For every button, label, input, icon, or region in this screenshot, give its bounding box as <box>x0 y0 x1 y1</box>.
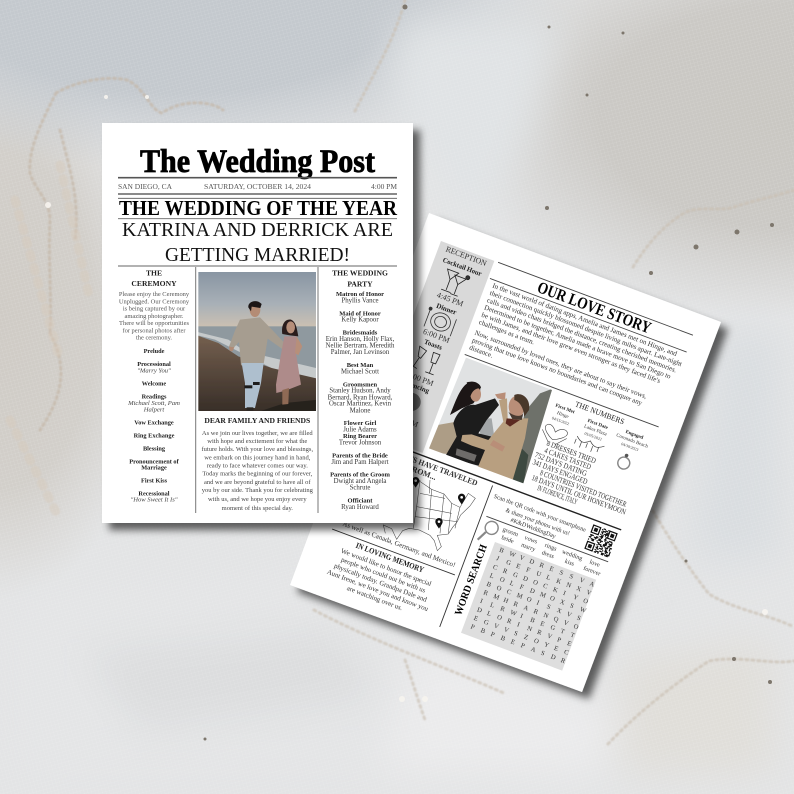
matron of honor: Matron of Honor <box>336 291 384 298</box>
main headline: THE WEDDING OF THE YEAR <box>119 196 398 220</box>
qr instructions: Scan the QR code with your smartphone <box>493 493 587 534</box>
the numbers: THE NUMBERS <box>574 400 626 426</box>
in loving memory: physically today. Grandpa Dale and <box>333 563 428 604</box>
ceremony program: Ring Exchange <box>134 432 175 439</box>
in loving memory: are watching over us. <box>346 585 404 612</box>
flower girl and ring bearer: Ring Bearer <box>343 433 377 440</box>
panel: the wedding party: THE WEDDING <box>332 268 388 278</box>
milestone: engaged: Engaged <box>624 430 644 441</box>
sub headline <box>122 219 393 266</box>
word search grid <box>461 542 598 671</box>
numbers list: 18 DAYS UNTIL OUR HONEYMOON <box>530 473 627 517</box>
ceremony program: "How Sweet It Is" <box>130 497 178 504</box>
ceremony program: Processional <box>137 361 171 368</box>
groomsmen: Bernard, Ryan Howard, <box>328 394 393 401</box>
matron of honor <box>336 291 384 304</box>
maid of honor: Kelly Kapoor <box>341 317 379 324</box>
back page sheet <box>290 213 721 692</box>
heading: our love story: OUR LOVE STORY <box>535 277 654 337</box>
word list: wedding <box>561 548 583 562</box>
word search grid: BOCMOISXVS <box>485 581 582 623</box>
word search grid: RMHRARNQVO <box>482 589 580 631</box>
beach couple photo <box>198 272 316 411</box>
word list: bride <box>500 534 515 545</box>
bridesmaids <box>326 330 395 356</box>
text: love story: challenges as a team. <box>478 318 536 346</box>
word list: vows <box>524 534 539 546</box>
ceremony program: Blessing <box>143 445 166 452</box>
numbers list: 8 COUNTRIES VISITED TOGETHER <box>539 468 629 509</box>
ceremony intro text <box>119 291 190 342</box>
front newspaper page <box>102 123 413 523</box>
dateline <box>118 183 398 191</box>
officiant <box>341 497 379 511</box>
letter text: with hope and excitement for what the <box>207 438 307 445</box>
groomsmen: Stanley Hudson, Andy <box>329 388 391 395</box>
word search grid: LOLFDMOXSW <box>489 572 588 615</box>
groomsmen: Groomsmen <box>343 381 377 388</box>
bridesmaids: Palmer, Jan Levinson <box>331 349 390 356</box>
word list: kiss <box>564 558 576 568</box>
panel: dear family and friends <box>202 416 314 512</box>
numbers list: 752 DAYS DATING <box>534 450 589 478</box>
ceremony program: Prelude <box>144 348 165 355</box>
ceremony intro text: for personal photos after <box>122 328 186 334</box>
word list: love <box>588 559 601 569</box>
word search grid: CRGDOCKIYO <box>492 564 589 606</box>
letter text: ready to face whatever comes our way. <box>207 462 308 469</box>
numbers list: 4 CAKES TASTED <box>543 446 593 472</box>
word list: forever <box>582 565 601 578</box>
ceremony program: "Marry You" <box>137 368 171 375</box>
letter text: we embark on this journey hand in hand, <box>204 454 311 461</box>
milestone: first date: First Date <box>586 419 609 431</box>
ceremony intro text: Unplugged. Our Ceremony <box>119 298 190 306</box>
ceremony program: Halpert <box>143 406 164 413</box>
ceremony intro text: the ceremony. <box>136 335 172 342</box>
ceremony program <box>127 348 180 504</box>
letter text: As we join our lives together, we are filled <box>202 430 313 437</box>
ceremony intro text: amazing photographer. <box>124 313 184 320</box>
best man: Best Man <box>347 362 374 369</box>
in loving memory: people who could not be with us <box>340 557 427 595</box>
flower girl and ring bearer: Trevor Johnson <box>339 439 382 446</box>
text: love story: be with James, and their love grew even stronger as they faced life's <box>480 311 662 385</box>
ceremony program: Welcome <box>142 380 166 387</box>
map of the United States with pins <box>383 470 475 551</box>
bridesmaids: Bridesmaids <box>343 330 378 337</box>
milestone: engaged <box>606 427 651 475</box>
icon: plate and cutlery <box>423 307 457 336</box>
dateline: SATURDAY, OCTOBER 14, 2024 <box>204 183 311 191</box>
bridesmaids: Erin Hanson, Holly Flax, <box>326 336 395 343</box>
in loving memory <box>323 535 442 621</box>
qr instructions <box>487 493 587 549</box>
matron of honor: Phyllis Vance <box>341 297 379 304</box>
icon: map pin <box>412 477 419 488</box>
numbers list: 341 DAYS ENGAGED <box>531 457 589 486</box>
reception sidebar: Dancing <box>404 379 431 395</box>
reception sidebar: 7:00 PM <box>406 370 435 388</box>
dateline: 4:00 PM <box>371 183 398 191</box>
sub headline: GETTING MARRIED! <box>165 244 350 266</box>
maid of honor: Maid of Honor <box>339 310 381 317</box>
milestone: first date: 05/05/2022 <box>584 431 603 442</box>
back newspaper page <box>290 213 721 692</box>
parents of the bride: Parents of the Bride <box>332 452 388 459</box>
text: love story <box>468 282 686 423</box>
panel: dear family and friends: DEAR FAMILY AND FRIENDS <box>204 416 310 425</box>
couple dancing photo <box>429 358 552 484</box>
parents of the groom: Schrute <box>350 485 370 492</box>
the numbers <box>521 392 657 524</box>
ceremony program: Vow Exchange <box>134 419 174 426</box>
icon: magnifying glass <box>478 519 500 545</box>
word search grid: BWVDRESSVA <box>498 547 596 589</box>
numbers list: 8 DRESSES TRIED <box>545 439 598 465</box>
best man: Michael Scott <box>341 368 379 375</box>
text: love story: Determined to be together, Amelia made a brave move to San Diego to <box>483 304 672 381</box>
icon: cocktail glasses <box>440 268 470 298</box>
panel: the ceremony: CEREMONY <box>131 279 177 288</box>
officiant: Ryan Howard <box>341 504 379 511</box>
letter text: moment of this special day. <box>222 505 293 512</box>
panel: the wedding party: PARTY <box>347 280 373 288</box>
icon: map pin <box>458 494 465 504</box>
text: love story: distance. <box>468 344 494 360</box>
word list: rings <box>544 542 558 553</box>
letter text: with us, and we hope you enjoy every <box>208 496 307 503</box>
milestone: engaged: Coronado Beach <box>615 433 649 450</box>
bridesmaids: Nellie Bertram, Meredith <box>326 342 395 349</box>
milestone: engaged: 04/30/2023 <box>620 441 639 452</box>
panel: the ceremony: THE <box>146 268 162 278</box>
word list: groom <box>502 526 519 538</box>
back page rotated content <box>313 240 694 675</box>
letter text: you by our side. Thank you for celebrating <box>202 487 314 494</box>
word search grid: DLORINRVPE <box>476 606 572 648</box>
milestone: first date: Lakes Plaza <box>583 424 608 438</box>
in loving memory: IN LOVING MEMORY <box>355 541 425 574</box>
groomsmen <box>328 381 393 414</box>
ceremony program: First Kiss <box>141 478 168 485</box>
best man <box>341 362 379 375</box>
ceremony program: Marriage <box>141 465 167 472</box>
numbers list: IN FLORENCE, ITALY <box>536 483 579 506</box>
word search grid: JGEFULKNXV <box>495 555 592 597</box>
reception sidebar <box>369 241 494 453</box>
ceremony program: Readings <box>142 394 167 401</box>
reception sidebar: 4:45 PM <box>435 290 465 308</box>
text: love story: proving that true love knows no boundaries and can conquer any <box>471 336 644 407</box>
parents of the bride <box>331 452 389 466</box>
word list: dress <box>541 549 556 560</box>
qr instructions: #K&DWeddingDay <box>509 517 558 540</box>
in loving memory: We would like to honor the special <box>340 548 432 588</box>
masthead title: The Wedding Post <box>140 144 375 180</box>
heading: our love story <box>490 261 693 352</box>
parents of the groom <box>330 472 391 492</box>
ceremony program: Recessional <box>138 491 170 498</box>
caption: other countries: As well as Canada, Germany, and Mexico! <box>341 520 457 569</box>
flower girl and ring bearer: Flower Girl <box>344 420 376 427</box>
reception sidebar: 8:00 PM <box>390 411 420 429</box>
letter text <box>202 430 314 512</box>
text: love story: calls and video chats bridged the distance, creating cherished memories. <box>486 296 678 375</box>
icon: champagne flutes <box>409 345 441 375</box>
letter text: Today marks the beginning of our forever, <box>202 470 313 477</box>
reception sidebar: Dinner <box>435 302 458 317</box>
numbers list <box>523 436 641 524</box>
ceremony intro text: There will be opportunities <box>119 320 189 327</box>
icon: disco ball <box>400 390 423 414</box>
in loving memory: Aunt Irene, we love you and know you <box>326 569 429 613</box>
milestone: first met: 04/15/2022 <box>551 415 570 426</box>
icon: map pin <box>435 518 443 529</box>
word list: marry <box>520 542 537 554</box>
maid of honor <box>339 310 381 324</box>
text: love story: Now, surrounded by loved ones, they are about to say their vows, <box>474 329 648 401</box>
reception sidebar: 6:00 PM <box>422 327 451 345</box>
ceremony program: Michael Scott, Pam <box>127 400 180 407</box>
groomsmen: Oscar Martinez, Kevin <box>329 401 392 408</box>
ceremony program: Pronouncement of <box>129 458 180 465</box>
flower girl and ring bearer: Julie Adams <box>343 426 377 433</box>
letter text: and we are beyond grateful to have all of <box>204 479 311 486</box>
heading: word search: WORD SEARCH <box>453 543 490 617</box>
dateline: SAN DIEGO, CA <box>118 183 173 191</box>
word list <box>499 526 604 578</box>
ceremony intro text: is being captured by our <box>123 306 186 313</box>
word search grid: ILRWIBEGTT <box>479 598 576 640</box>
groomsmen: Malone <box>350 407 370 414</box>
parents of the bride: Jim and Pam Halpert <box>331 459 389 466</box>
milestone: first met: First Met <box>554 404 575 415</box>
parents of the groom: Dwight and Angela <box>334 478 386 485</box>
heading: guests have traveled from: FROM... <box>406 463 438 482</box>
milestone: first met <box>539 402 577 448</box>
text: love story: In the vast world of dating apps, Amelia and James met on Hinge, and <box>491 282 679 358</box>
parents of the groom: Parents of the Groom <box>330 472 391 479</box>
front page sheet <box>102 123 413 523</box>
reception sidebar: RECEPTION <box>444 245 488 268</box>
reception sidebar: Toasts <box>423 338 444 352</box>
officiant: Officiant <box>348 497 373 504</box>
flower girl and ring bearer <box>339 420 382 446</box>
reception sidebar: Cocktail Hour <box>442 256 483 278</box>
sub headline: KATRINA AND DERRICK ARE <box>122 219 393 241</box>
qr code <box>584 525 618 557</box>
panel: the ceremony <box>119 268 190 504</box>
milestone: first met: Hinge <box>556 411 570 420</box>
text: love story: their connection quickly blossomed despite living miles apart. Late-night <box>489 289 683 368</box>
milestone: first date <box>574 417 611 456</box>
word search grid: EGVVSZOYEC <box>473 615 570 657</box>
word search grid: PBPBEPASDR <box>470 623 567 665</box>
heading: guests have traveled from: OUR GUESTS HAVE TRAVELED <box>371 440 479 488</box>
letter text: future holds. With your love and blessings, <box>202 446 313 453</box>
panel: the wedding party <box>326 268 395 511</box>
ceremony intro text: Please enjoy the Ceremony <box>119 291 190 298</box>
qr instructions: & share your photos with us! <box>505 507 571 537</box>
